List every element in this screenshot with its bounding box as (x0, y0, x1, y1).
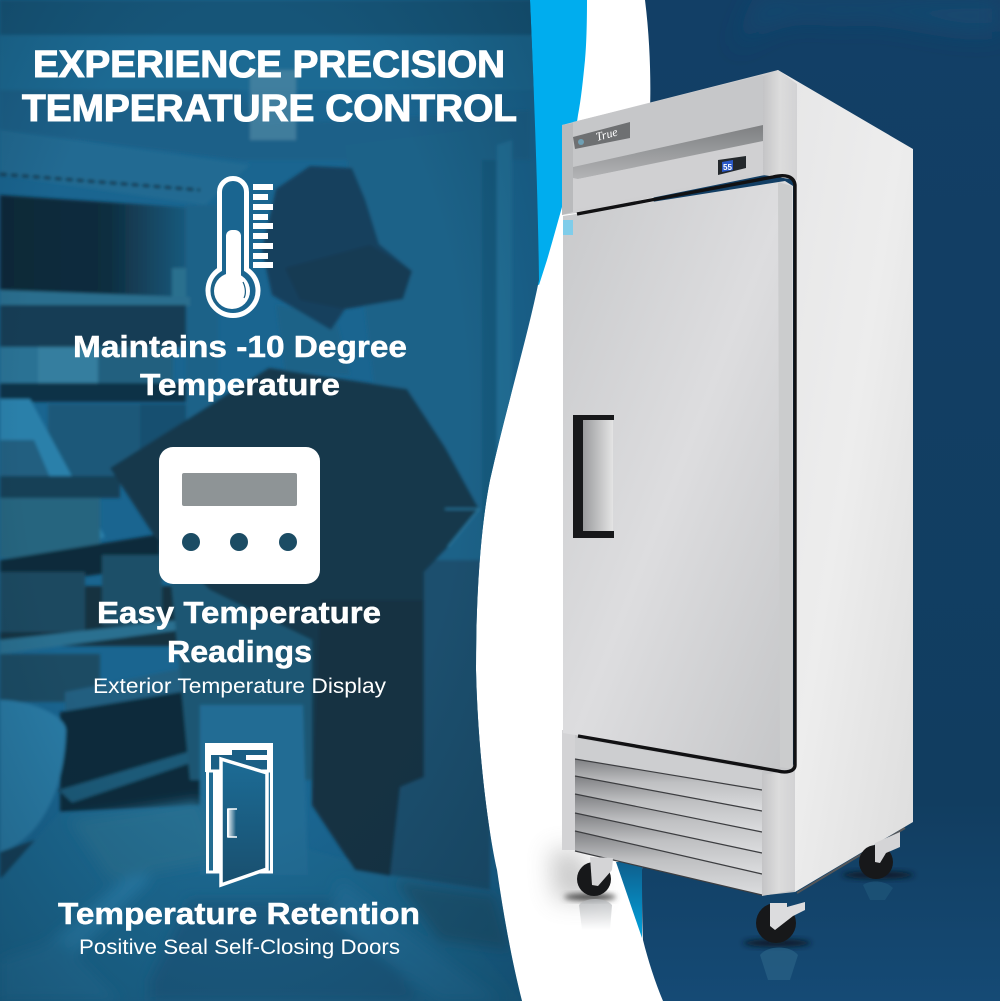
chef neck (279, 306, 346, 372)
heading: temperature retention: Temperature Retention (58, 896, 420, 931)
top band (562, 70, 797, 215)
ceiling (0, 0, 560, 35)
dark recess (573, 125, 763, 179)
white swoosh panel (400, 0, 663, 1001)
heading: easy temperature readings: Readings (167, 634, 312, 669)
wheel reflections (579, 899, 612, 930)
cyan swoosh (525, 0, 587, 285)
lower cabinet right (388, 560, 490, 890)
kitchen photo panel (0, 0, 560, 1001)
logo plate (573, 122, 630, 149)
title: EXPERIENCE PRECISION (33, 44, 505, 86)
icon: thermometer (208, 178, 273, 316)
left strip (562, 123, 573, 215)
digital display: 55 (723, 163, 732, 172)
icon: door (205, 743, 273, 885)
door handle (573, 415, 614, 538)
back wall behind arm (170, 584, 312, 782)
heading: easy temperature readings: Easy Temperature (97, 595, 381, 630)
door (563, 181, 793, 769)
title (22, 44, 517, 130)
right door (350, 162, 498, 562)
heading: easy temperature readings (97, 595, 381, 669)
chef hat (262, 166, 412, 330)
side bottom edge (797, 828, 905, 893)
digital display (718, 156, 746, 175)
casters (577, 832, 900, 943)
cyan wedge bottom (616, 862, 642, 938)
logo plate: True (594, 125, 620, 144)
energy sticker (563, 220, 573, 235)
door seal (577, 176, 795, 772)
subtext: positive seal self-closing doors: Positive Seal Self-Closing Doors (79, 936, 400, 959)
bowl (0, 700, 66, 852)
subtext: exterior temperature display: Exterior Temperature Display (93, 675, 387, 698)
refrigerator (550, 70, 914, 980)
icon: digital display (159, 447, 320, 584)
shelving interior (0, 195, 195, 300)
blurred counter items (60, 874, 147, 951)
heading: maintains -10 degree temperature (73, 329, 407, 402)
corner strip (763, 70, 797, 180)
counter (0, 810, 522, 1001)
bottom grille (562, 730, 795, 896)
chef body (110, 366, 479, 792)
heading: maintains -10 degree temperature: Maintains -10 Degree (73, 329, 407, 364)
ground shadows (550, 850, 600, 900)
background silhouette top right (730, 0, 1000, 60)
side panel (778, 70, 913, 892)
canister (198, 704, 306, 850)
title: TEMPERATURE CONTROL (22, 88, 517, 130)
heading: maintains -10 degree temperature: Temperature (140, 367, 340, 402)
